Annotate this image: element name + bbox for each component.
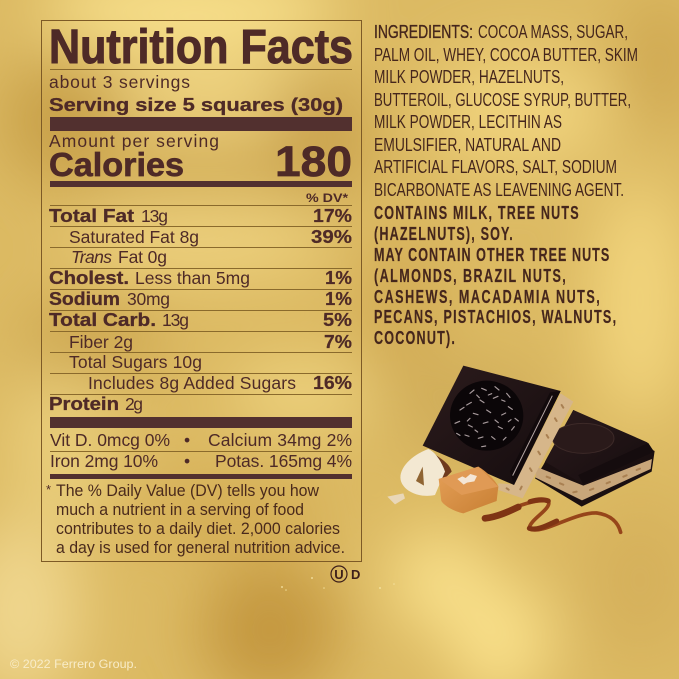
footnote: a day is used for general nutrition advice. bbox=[56, 538, 345, 557]
caramel drizzle bbox=[485, 500, 621, 532]
vitamins and minerals: Potas. 165mg 4% bbox=[215, 451, 352, 471]
hazelnut bbox=[387, 449, 452, 504]
nutrient rows: Total Carb. bbox=[49, 310, 156, 330]
heading: Nutrition Facts: Nutrition Facts bbox=[49, 21, 353, 74]
allergen statement: PECANS, PISTACHIOS, WALNUTS, bbox=[374, 308, 616, 328]
caramel cube bbox=[439, 467, 498, 513]
nutrient rows: Protein bbox=[49, 394, 119, 414]
nutrient rows: 7% bbox=[324, 332, 352, 352]
servings text bbox=[49, 72, 343, 115]
ingredients text: EMULSIFIER, NATURAL AND bbox=[374, 134, 561, 155]
icon: OU-D kosher mark: D bbox=[351, 567, 360, 582]
calories block: Amount per serving bbox=[49, 131, 219, 151]
nutrient rows: 13g bbox=[162, 310, 189, 330]
panel: nutrition facts bbox=[42, 20, 362, 562]
embossed round praline bbox=[450, 381, 523, 451]
nutrient rows: Cholest. bbox=[49, 268, 129, 288]
vitamins and minerals bbox=[50, 430, 352, 471]
nutrient rows: Total Sugars 10g bbox=[69, 352, 202, 372]
calories block bbox=[49, 131, 352, 186]
sparkles bbox=[281, 577, 395, 591]
allergen statement: (HAZELNUTS), SOY. bbox=[374, 225, 513, 245]
nutrient rows: 2g bbox=[125, 394, 143, 414]
servings text: about 3 servings bbox=[49, 72, 190, 92]
nutrient rows: 5% bbox=[323, 310, 352, 330]
ingredients text: COCOA MASS, SUGAR, bbox=[478, 21, 628, 42]
nutrient rows: 39% bbox=[311, 227, 352, 247]
allergen statement: MAY CONTAIN OTHER TREE NUTS bbox=[374, 246, 609, 266]
nutrient rows bbox=[49, 206, 352, 414]
footnote: * bbox=[46, 482, 51, 497]
back chocolate square bbox=[535, 410, 655, 507]
servings text: Serving size 5 squares (30g) bbox=[49, 95, 343, 115]
icon: OU-D kosher mark bbox=[331, 566, 360, 582]
ingredients text: INGREDIENTS: bbox=[374, 21, 473, 42]
nutrient rows: Fat 0g bbox=[118, 247, 167, 267]
nutrient rows: 17% bbox=[313, 206, 352, 226]
nutrient rows: Less than 5mg bbox=[135, 268, 250, 288]
nutrient rows: 13g bbox=[141, 206, 168, 226]
footnote: much a nutrient in a serving of food bbox=[56, 500, 304, 519]
vitamins and minerals: • bbox=[184, 430, 190, 450]
ingredients text bbox=[374, 21, 638, 200]
nutrient rows: Total Fat bbox=[49, 206, 134, 226]
calories block: Calories bbox=[49, 146, 184, 183]
vitamins and minerals: • bbox=[184, 451, 190, 471]
panel border bbox=[42, 20, 362, 562]
nutrient rows: Includes 8g Added Sugars bbox=[88, 373, 296, 393]
nutrient rows: 16% bbox=[313, 373, 352, 393]
row rules bbox=[50, 205, 352, 452]
footnote bbox=[46, 481, 345, 557]
vitamins and minerals: Iron 2mg 10% bbox=[50, 451, 158, 471]
front chocolate square bbox=[423, 366, 573, 498]
icon: OU-D kosher mark: U bbox=[334, 567, 344, 582]
vitamins and minerals: Calcium 34mg 2% bbox=[208, 430, 352, 450]
allergen statement: CASHEWS, MACADAMIA NUTS, bbox=[374, 288, 600, 308]
footnote: The % Daily Value (DV) tells you how bbox=[56, 481, 320, 500]
thick bars and rules bbox=[50, 69, 352, 479]
nutrient rows: Sodium bbox=[49, 289, 120, 309]
ingredients text: MILK POWDER, HAZELNUTS, bbox=[374, 66, 564, 87]
allergen statement bbox=[374, 204, 616, 349]
allergen statement: CONTAINS MILK, TREE NUTS bbox=[374, 204, 579, 224]
allergen statement: COCONUT). bbox=[374, 329, 455, 349]
copyright: © 2022 Ferrero Group. bbox=[10, 659, 137, 671]
nutrient rows: 1% bbox=[325, 289, 352, 309]
calories block: 180 bbox=[275, 138, 352, 186]
nutrient rows: 30mg bbox=[127, 289, 170, 309]
nutrient rows: Saturated Fat 8g bbox=[69, 227, 199, 247]
daily value header: % DV* bbox=[306, 191, 348, 205]
allergen statement: (ALMONDS, BRAZIL NUTS, bbox=[374, 267, 566, 287]
illustration: chocolate squares, hazelnut, caramel bbox=[387, 366, 655, 532]
ingredients text: MILK POWDER, LECITHIN AS bbox=[374, 111, 562, 132]
nutrient rows: Fiber 2g bbox=[69, 332, 133, 352]
vitamins and minerals: Vit D. 0mcg 0% bbox=[50, 430, 170, 450]
nutrient rows: Trans bbox=[71, 247, 112, 267]
nutrient rows: 1% bbox=[325, 268, 352, 288]
footnote: contributes to a daily diet. 2,000 calories bbox=[56, 519, 340, 538]
